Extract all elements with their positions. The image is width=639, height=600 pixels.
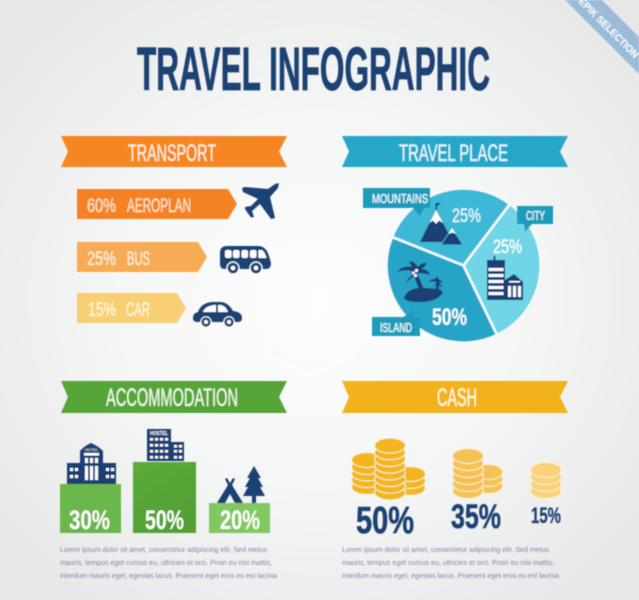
icon: bus (220, 246, 271, 274)
callout: city: CITY (526, 208, 545, 223)
banner: accommodation (61, 381, 287, 413)
banner: travel place: TRAVEL PLACE (399, 140, 508, 167)
banner: transport: TRANSPORT (128, 140, 216, 167)
icon: hostel: HOSTEL (150, 431, 169, 437)
label: 25% city: 25% (493, 236, 522, 258)
panel: accommodation chart (60, 429, 270, 535)
label: cash 35%: 35% (451, 498, 501, 536)
icon: car (193, 302, 242, 327)
icon: medium coin stacks (452, 448, 503, 498)
panel: transport bars (77, 183, 279, 327)
icon: hotel (67, 443, 116, 484)
bar: aeroplan 60%: 60% (87, 195, 116, 217)
text block: cash description: interdum mauris eget, egestas lacus. Praesent eget eros eu est lacinia (342, 571, 560, 580)
icon: large coin stacks (352, 438, 426, 500)
text block: cash description: Lorem ipsum dolor sit amet, consectetur adipiscing elit. Sed metus (342, 545, 549, 554)
text block: accommodation description (60, 545, 278, 580)
watermark (268, 292, 354, 376)
label: 25% mountains: 25% (452, 205, 481, 227)
bar: car 15%: CAR (126, 299, 150, 321)
text block: cash description: mauris, tempus eget cursus eu, ultricies et orci. Proin eu nisi mattis, (342, 558, 554, 567)
icon: tent (217, 478, 243, 503)
label: 50% island: 50% (432, 304, 467, 331)
banner: transport (61, 136, 287, 167)
slice: island 50% (386, 237, 497, 343)
callout: island (372, 310, 420, 336)
icon: city buildings (487, 256, 523, 300)
bar: car 15%: 15% (88, 299, 116, 321)
callout: mountains: MOUNTAINS (372, 191, 428, 206)
label: cash 15%: 15% (531, 503, 561, 528)
bar: bus 25% (77, 242, 207, 272)
banner: accommodation: ACCOMMODATION (106, 384, 238, 412)
bar: car 15% (77, 293, 186, 323)
bar: hotel 30% (60, 484, 121, 535)
callout: mountains (363, 188, 430, 216)
bar: bus 25%: BUS (127, 248, 150, 270)
icon: pine tree (243, 466, 265, 503)
slice: city 25% (464, 204, 541, 335)
pie chart: travel place (363, 188, 553, 343)
text block: cash description (342, 545, 560, 580)
slice: mountains 25% (392, 188, 510, 266)
icon: island with palm trees (397, 261, 443, 302)
banner: travel place (342, 136, 568, 167)
callout: city (517, 206, 553, 232)
icon: hotel: HOTEL (85, 447, 99, 452)
bar: hostel 50%: 50% (145, 505, 184, 535)
text block: accommodation description: mauris, tempus eget cursus eu, ultricies et orci. Proin eu nisi mattis, (60, 558, 272, 567)
icon: small coin stack (530, 462, 562, 498)
banner: cash: CASH (437, 384, 477, 412)
bar: hotel 30%: 30% (69, 505, 110, 535)
text block: accommodation description: interdum mauris eget, egestas lacus. Praesent eget eros eu est lacinia (60, 571, 278, 580)
label: cash 50%: 50% (356, 500, 414, 542)
bar: camping 20%: 20% (220, 505, 260, 535)
icon: aeroplane (242, 183, 279, 219)
icon: mountains (420, 203, 463, 245)
bar: hostel 50% (133, 462, 196, 535)
icon: hostel (147, 429, 184, 461)
bar: aeroplan 60%: AEROPLAN (127, 195, 191, 217)
banner: cash (342, 381, 568, 413)
bar: bus 25%: 25% (87, 248, 116, 270)
text block: accommodation description: Lorem ipsum dolor sit amet, consectetur adipiscing elit. Sed metus (60, 545, 267, 554)
callout: island: ISLAND (380, 320, 412, 335)
bar: aeroplan 60% (77, 189, 237, 219)
